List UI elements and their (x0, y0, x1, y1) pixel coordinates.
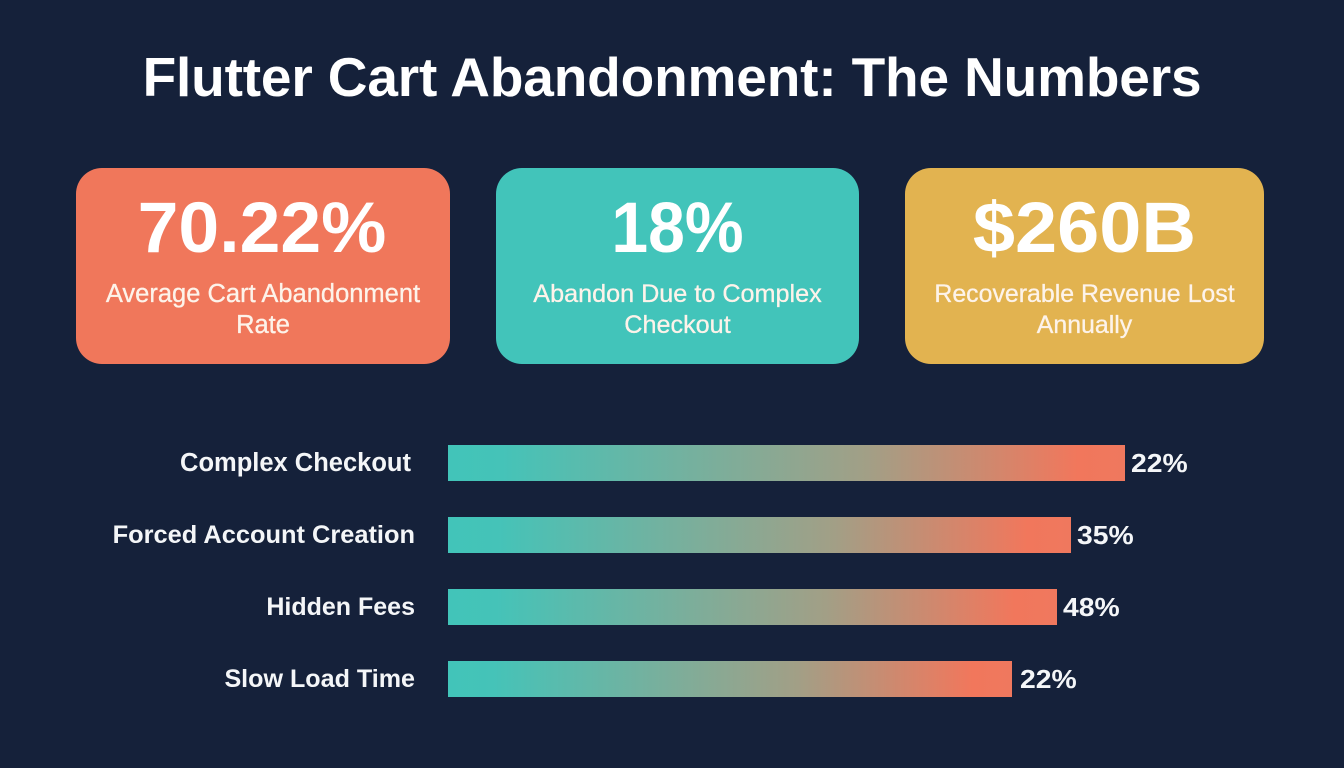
bar label: complex checkout: Complex Checkout (180, 449, 411, 477)
bar value: 22%: 22% (1131, 448, 1188, 478)
bar: forced account creation (448, 517, 1071, 553)
stat: 70.22%: 70.22% (138, 189, 386, 268)
bar value: 35%: 35% (1077, 520, 1134, 550)
stat label: abandon due to complex checkout: Checkout (624, 311, 731, 339)
bar: hidden fees (448, 589, 1057, 625)
stat label: average cart abandonment rate (106, 280, 420, 339)
bar: complex checkout (448, 445, 1125, 481)
stat label: recoverable revenue lost annually: Annually (1037, 311, 1132, 339)
bar value: 22%: 22% (1020, 664, 1077, 694)
stat: $260B: $260B (973, 189, 1196, 268)
bar row: complex checkout (180, 445, 1188, 481)
stat label: abandon due to complex checkout (533, 280, 822, 339)
stat label: recoverable revenue lost annually (934, 280, 1235, 339)
stat label: abandon due to complex checkout: Abandon Due to Complex (533, 280, 822, 308)
panel: recoverable revenue lost annually (905, 168, 1264, 364)
bar label: hidden fees: Hidden Fees (266, 593, 415, 621)
stat: 18%: 18% (611, 189, 744, 268)
panel: average cart abandonment rate (76, 168, 450, 364)
stat label: average cart abandonment rate: Average Cart Abandonment (106, 280, 420, 308)
bar row: slow load time (224, 661, 1077, 697)
bar row: hidden fees (266, 589, 1120, 625)
title: Flutter Cart Abandonment: The Numbers (143, 46, 1201, 108)
bar row: forced account creation (113, 517, 1134, 553)
bar label: forced account creation: Forced Account Creation (113, 521, 415, 549)
stat label: recoverable revenue lost annually: Recoverable Revenue Lost (934, 280, 1235, 308)
bar value: 48%: 48% (1063, 592, 1120, 622)
stat label: average cart abandonment rate: Rate (236, 311, 290, 339)
bar chart (113, 445, 1188, 697)
bar label: slow load time: Slow Load Time (224, 665, 415, 693)
panel: abandon due to complex checkout (496, 168, 859, 364)
bar: slow load time (448, 661, 1012, 697)
